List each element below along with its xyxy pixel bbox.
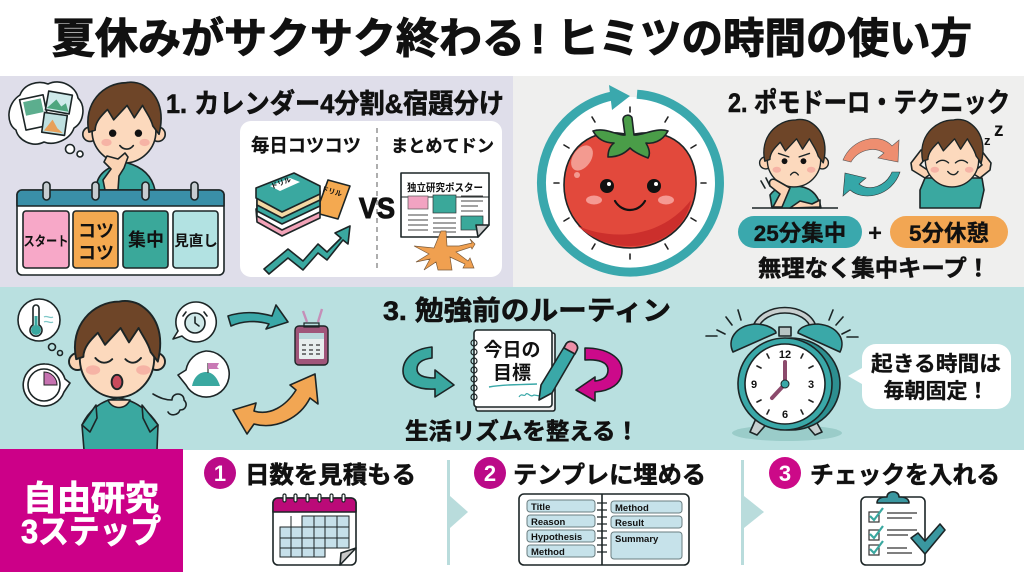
number 3	[769, 457, 801, 489]
tomato clock	[541, 85, 719, 272]
alarm clock: 6	[782, 409, 788, 421]
icon: tomato	[564, 115, 696, 248]
phase: review: 見直し	[174, 232, 218, 250]
phase: steady: コツ	[78, 221, 114, 241]
icon: rising arrow	[264, 226, 350, 274]
notebook text: 今日の	[483, 339, 541, 361]
title: ヒミツの時間の使い方	[557, 15, 972, 62]
icon: clipboard	[861, 492, 945, 565]
snore big z: z	[994, 120, 1004, 141]
icon: pencil	[539, 342, 578, 400]
icon: drill stack	[256, 173, 350, 236]
speech bubble: fixed wake time	[848, 344, 1011, 409]
chevron 1	[447, 460, 468, 565]
phase: focus: 集中	[128, 230, 164, 250]
step 2	[474, 457, 706, 565]
thought bubble with photos	[9, 82, 83, 157]
phase: steady: コツ	[78, 243, 114, 263]
step 1 label: 日数を見積もる	[245, 462, 416, 489]
step 2 label: テンプレに埋める	[513, 462, 706, 489]
banner: free research: 3ステップ	[21, 513, 161, 550]
boy concentrating	[752, 119, 838, 208]
speech bubble: fixed wake time: 起きる時間は	[871, 353, 1001, 376]
heading 1: 1. カレンダー4分割&宿題分け	[166, 88, 504, 119]
number 3: 3	[779, 461, 791, 486]
alarm clock: 9	[751, 379, 757, 391]
icon: template notebook: Title	[531, 502, 550, 513]
pill: 25 minutes focus: 25分集中	[754, 221, 846, 246]
notebook: today's goal	[471, 330, 555, 411]
bubble: alarm clock	[173, 302, 216, 342]
thought dots	[48, 344, 62, 356]
chevron 2	[741, 460, 764, 565]
label: steady every day: 毎日コツコツ	[251, 135, 361, 156]
icon: template notebook: Method	[615, 503, 649, 514]
icon: research poster	[401, 173, 489, 237]
title: 夏休みがサクサク終わる	[52, 15, 525, 62]
icon: template notebook: Result	[615, 518, 645, 529]
notebook text: 目標	[493, 362, 531, 384]
icon: burst	[414, 231, 475, 270]
panel: routine before study	[0, 287, 1024, 450]
number 1	[204, 457, 236, 489]
notebook text	[483, 339, 541, 384]
number 2	[474, 457, 506, 489]
icon: drill stack: ドリル	[320, 186, 343, 198]
arrow: teal to planner	[228, 305, 288, 329]
number 1: 1	[214, 461, 226, 486]
step 3	[769, 457, 1000, 565]
phase: start: スタート	[24, 234, 68, 249]
phase: start	[23, 211, 69, 268]
icon: template notebook: Hypothesis	[531, 532, 582, 543]
step 3 label: チェックを入れる	[810, 462, 1000, 489]
icon: drill stack: ドリル	[270, 176, 292, 191]
icon: calendar	[273, 494, 356, 565]
speech bubble: fixed wake time: 毎朝固定！	[884, 380, 988, 403]
icon: template notebook: Summary	[615, 534, 659, 545]
snore letters: z	[984, 133, 991, 148]
boy thinking	[83, 82, 165, 190]
plus sign: +	[868, 220, 882, 247]
icon: template notebook: Method	[531, 547, 565, 558]
pill: 25 minutes focus	[738, 216, 862, 248]
comparison card	[240, 121, 502, 277]
heading 3: 3. 勉強前のルーティン	[383, 296, 671, 326]
pill: 5 minutes break	[890, 216, 1008, 248]
panel: calendar and homework split	[0, 76, 513, 288]
phase: focus	[123, 211, 168, 268]
title	[52, 15, 972, 62]
icon: template notebook: Reason	[531, 517, 566, 528]
title: !	[531, 15, 545, 62]
icon: planner	[295, 309, 328, 365]
icon: template notebook	[519, 494, 689, 565]
arrow: teal into notebook	[403, 347, 454, 397]
cycle arrows	[843, 138, 900, 196]
icon: research poster: 独立研究ポスター	[407, 181, 483, 194]
arrow: magenta into notebook	[576, 348, 622, 401]
boy yawning	[69, 301, 165, 450]
pill: 5 minutes break: 5分休憩	[909, 221, 989, 246]
banner: free research: 自由研究	[23, 480, 159, 518]
panel: free research three steps	[0, 449, 1024, 572]
label: all at once: まとめてドン	[391, 136, 494, 156]
alarm clock: 3	[808, 379, 814, 391]
breath puff	[153, 394, 186, 415]
alarm clock: 12	[779, 349, 791, 361]
phase: review	[173, 211, 218, 268]
panel: pomodoro technique	[513, 76, 1024, 288]
rhythm caption: 生活リズムを整える！	[405, 418, 639, 444]
pomodoro caption: 無理なく集中キープ！	[758, 255, 990, 281]
step 1	[204, 457, 416, 565]
phase: steady	[73, 211, 118, 268]
alarm clock	[706, 310, 858, 441]
VS: VS	[359, 193, 395, 225]
boy resting	[911, 119, 991, 208]
number 2: 2	[484, 461, 496, 486]
banner: free research	[0, 449, 183, 572]
wall calendar with four phases	[17, 182, 224, 275]
bubble: thermometer	[18, 299, 60, 341]
bubble: clock	[23, 364, 70, 406]
arrow: orange double	[233, 374, 318, 434]
bubble: flag on hill	[178, 351, 229, 397]
